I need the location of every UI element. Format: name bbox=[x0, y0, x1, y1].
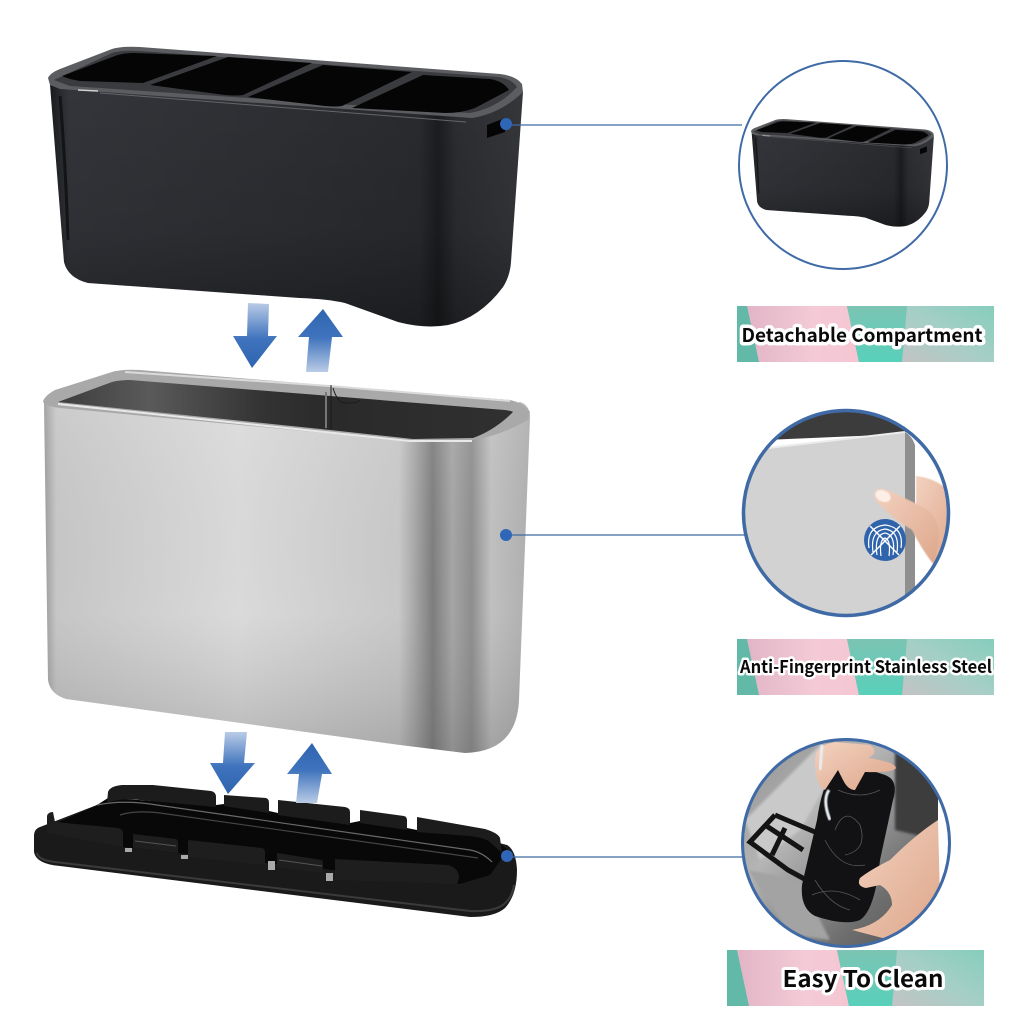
banner text: Detachable Compartment bbox=[742, 321, 982, 348]
water bbox=[820, 745, 830, 820]
black detachable compartment bbox=[48, 47, 523, 326]
banner text: Anti-Fingerprint Stainless Steel bbox=[739, 654, 992, 679]
arrow: top down bbox=[233, 303, 277, 368]
callout line: tray bbox=[501, 850, 744, 862]
circle: compartment detail bbox=[739, 61, 947, 269]
arrow: top up bbox=[298, 309, 343, 372]
tray front tabs bbox=[47, 812, 459, 884]
callout line: compartment bbox=[500, 118, 742, 130]
arrow: bottom down bbox=[210, 732, 255, 794]
circle: anti-fingerprint detail bbox=[740, 405, 955, 625]
icon: fingerprint badge bbox=[864, 519, 906, 561]
base tray bbox=[34, 785, 517, 917]
banner text: Easy To Clean bbox=[782, 960, 944, 994]
stainless steel body bbox=[43, 370, 530, 753]
wet black tray bbox=[802, 768, 895, 922]
circle: easy to clean photo bbox=[740, 735, 958, 950]
top hand bbox=[815, 742, 896, 790]
banner: easy to clean bbox=[727, 950, 984, 1006]
banner: anti-fingerprint bbox=[737, 639, 994, 695]
rack bbox=[750, 815, 815, 882]
tray back tabs bbox=[107, 785, 502, 853]
banner: detachable compartment bbox=[737, 306, 994, 362]
right hand bbox=[852, 820, 940, 940]
arrow: bottom up bbox=[287, 743, 332, 803]
icon: hand bbox=[874, 476, 947, 564]
callout line: steel bbox=[500, 529, 745, 541]
